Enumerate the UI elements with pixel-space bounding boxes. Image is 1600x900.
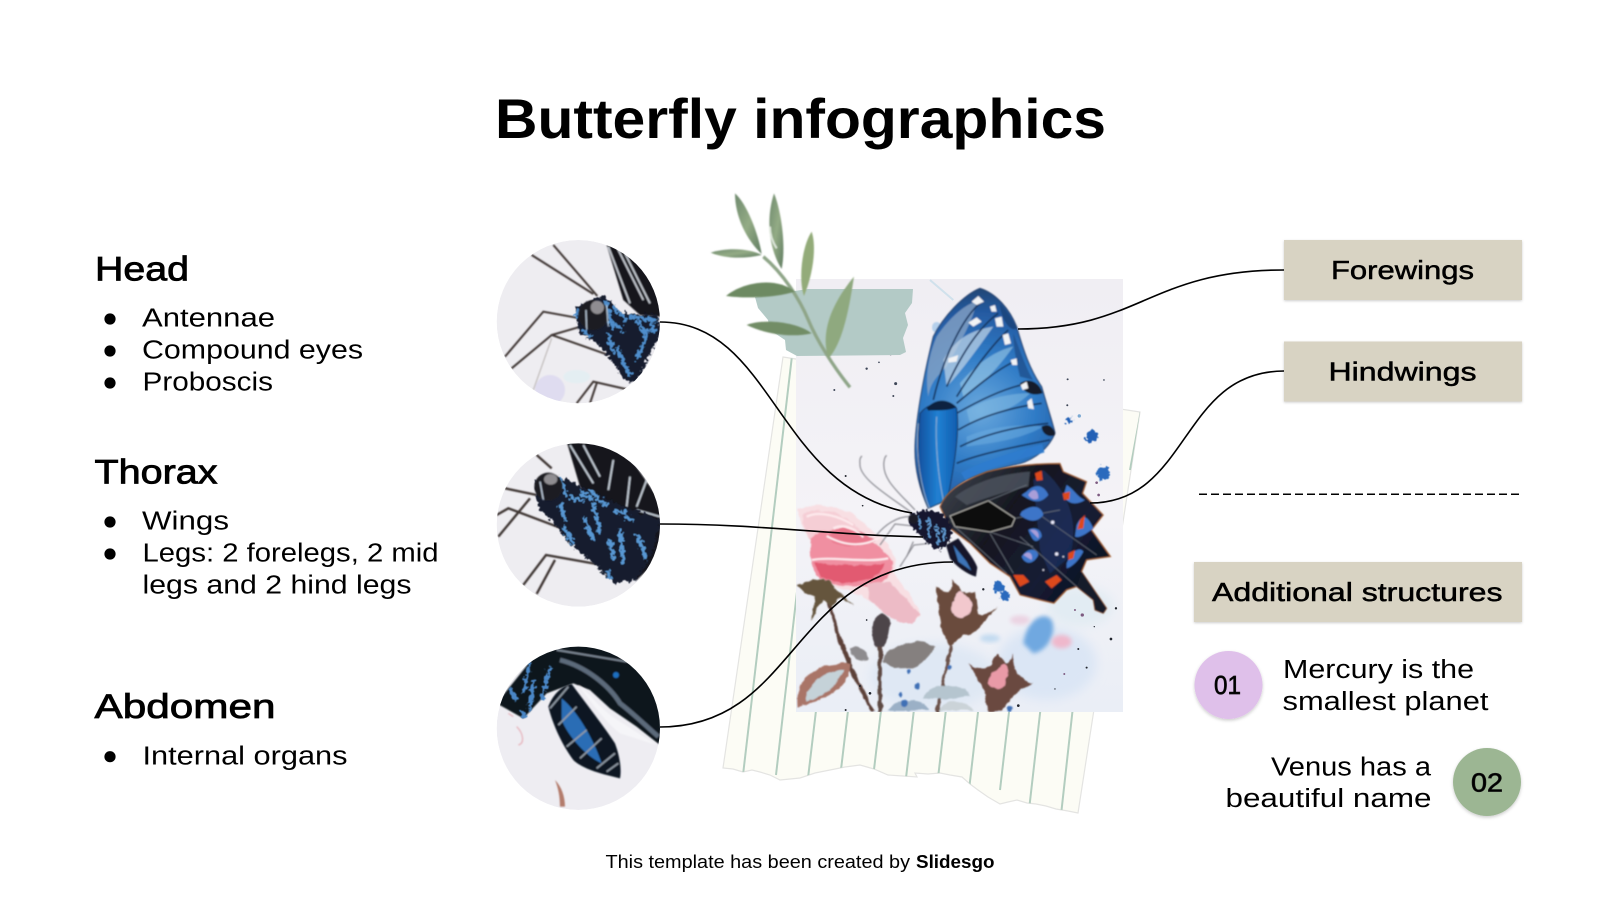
item 01: Mercury is the [1283,656,1474,684]
illustration: collage [711,193,1143,815]
rose flower [797,506,920,623]
connector: forewings [1018,270,1284,329]
paint splatter [845,475,1117,711]
label: additional structures: Additional structures [1212,577,1502,607]
connector: head to butterfly [660,322,912,513]
label: hindwings [1284,342,1522,402]
bullet list: head: Proboscis [142,369,273,397]
label: forewings: Forewings [1331,255,1474,285]
bullet list: thorax: Wings [142,508,229,536]
item 01 [1194,651,1488,719]
panel: abdomen list [94,688,348,770]
title: Butterfly infographics [495,87,1106,150]
bullet list: abdomen [104,742,348,770]
item 02: 02 [1471,768,1503,798]
footer credit: Slidesgo [916,852,995,872]
notebook paper [723,330,1143,815]
circle crop: head detail [497,240,662,405]
paint splatter: upper [833,280,1105,443]
panel: head list [95,251,363,397]
item 02 [1226,748,1521,816]
circle crop: thorax detail [497,442,662,607]
footer credit: This template has been created by [606,852,910,872]
bullet list: thorax [104,508,439,600]
bullet list: head: Antennae [142,305,275,333]
item 02: Venus has a [1271,754,1432,782]
heading: head: Head [95,251,189,289]
leaf sprig [711,193,854,387]
item 01: smallest planet [1282,688,1488,716]
heading: thorax: Thorax [94,454,218,492]
forewing [915,288,1055,510]
bullet list: abdomen: Internal organs [142,742,348,770]
panel: thorax list [94,454,438,600]
label: additional structures [1194,562,1522,622]
bullet list: thorax: Legs: 2 forelegs, 2 mid [142,540,438,568]
item 02: beautiful name [1226,785,1432,813]
connector: abdomen to butterfly [660,562,953,727]
watercolor photo [796,279,1123,713]
body and legs [860,455,977,577]
label: hindwings: Hindwings [1328,356,1476,386]
item 01: 01 [1214,670,1241,700]
connector: thorax to butterfly [660,524,923,537]
bullet list: head [104,305,363,397]
rose stems and buds [796,578,1033,713]
bullet list: thorax: legs and 2 hind legs [142,572,412,600]
circle crop: abdomen detail [497,642,663,810]
heading: abdomen: Abdomen [94,688,276,726]
hindwing [940,463,1111,613]
label: forewings [1284,240,1522,300]
connector: hindwings [1090,371,1284,503]
masking tape [755,289,913,356]
bullet list: head: Compound eyes [142,337,363,365]
butterfly [860,288,1111,613]
